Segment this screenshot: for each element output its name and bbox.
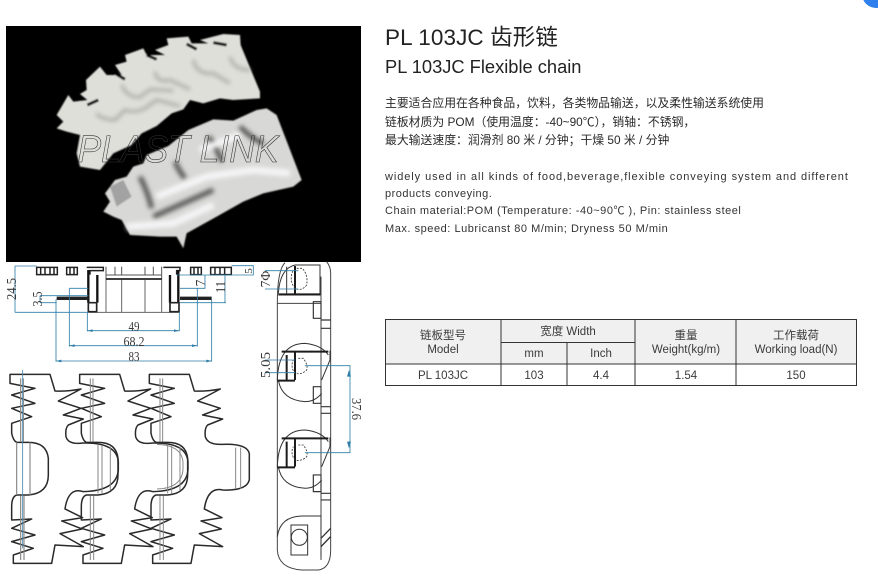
english description: widely used in all kinds of food,beverage,flexible conveying system and different [385, 171, 849, 183]
top hatch row [37, 267, 231, 275]
corner badge [862, 0, 878, 8]
product photo [6, 26, 361, 262]
table header: model: Model [427, 344, 459, 356]
subtitle: PL 103JC Flexible chain [385, 56, 581, 77]
table header: width [524, 324, 612, 360]
english description: Chain material:POM (Temperature: -40~90℃ ), Pin: stainless steel [385, 204, 741, 216]
table row: PL 103JC [418, 370, 468, 382]
english description: Max. speed: Lubricanst 80 M/min; Dryness 50 M/min [385, 222, 668, 234]
table header: width: Inch [590, 348, 612, 360]
table header: weight: Weight(kg/m) [652, 344, 720, 356]
watermark: PLAST LINK [78, 129, 280, 171]
chinese description: 最大输送速度：润滑剂 80 米 / 分钟；干燥 50 米 / 分钟 [385, 133, 669, 147]
table grid [385, 319, 857, 386]
dimension labels: front view: 11 [213, 281, 228, 293]
drawing: top plan of chain links [10, 370, 249, 563]
table header: model: 链板型号 [420, 328, 466, 342]
dimension lines [15, 266, 253, 362]
upper chain section [57, 34, 260, 170]
chinese description: 链板材质为 POM（使用温度：-40~90℃），销轴：不锈钢， [385, 115, 695, 129]
table row: 1.54 [675, 370, 698, 382]
chinese description: 主要适合应用在各种食品，饮料，各类物品输送，以及柔性输送系统使用 [385, 96, 764, 110]
dimension labels: side view: 5.05 [258, 352, 273, 378]
dimension labels: side view [258, 271, 364, 420]
table header: working load: 工作载荷 [773, 329, 819, 342]
link 2 [80, 374, 188, 563]
english description: products conveying. [385, 188, 492, 200]
body [88, 280, 179, 312]
table header: working load: Working load(N) [755, 344, 838, 356]
table row: 150 [786, 370, 806, 382]
dimension labels: front view: 3.5 [30, 291, 45, 306]
drawing: front section view [15, 266, 253, 362]
link 3 [149, 374, 249, 563]
lower chain section [103, 108, 302, 248]
table header: weight: 重量 [674, 328, 698, 342]
table row [418, 370, 806, 382]
specification table [385, 319, 857, 386]
dimension labels: side view: 37.6 [349, 398, 364, 420]
title: PL 103JC 齿形链 [385, 25, 558, 50]
dimension labels: side view: 7Φ [258, 271, 273, 287]
dimension labels: front view: 5 [243, 268, 255, 274]
dimension labels: front view: 24.5 [4, 278, 19, 300]
dimension labels: front view: 68.2 [124, 334, 144, 349]
english description [385, 171, 849, 234]
table header: width: mm [524, 348, 544, 360]
dimension labels: front view [4, 268, 255, 364]
chinese description [385, 96, 764, 147]
table header: width: 宽度 Width [540, 324, 596, 338]
table row: 4.4 [593, 370, 610, 382]
link 1 [10, 370, 118, 563]
drawing: side view [265, 262, 351, 570]
dimension labels: front view: 83 [128, 349, 140, 364]
dimension labels: front view: 7 [193, 279, 208, 286]
table row: 103 [524, 370, 544, 382]
hinge details [277, 265, 331, 557]
dimension labels: front view: 49 [128, 319, 140, 334]
